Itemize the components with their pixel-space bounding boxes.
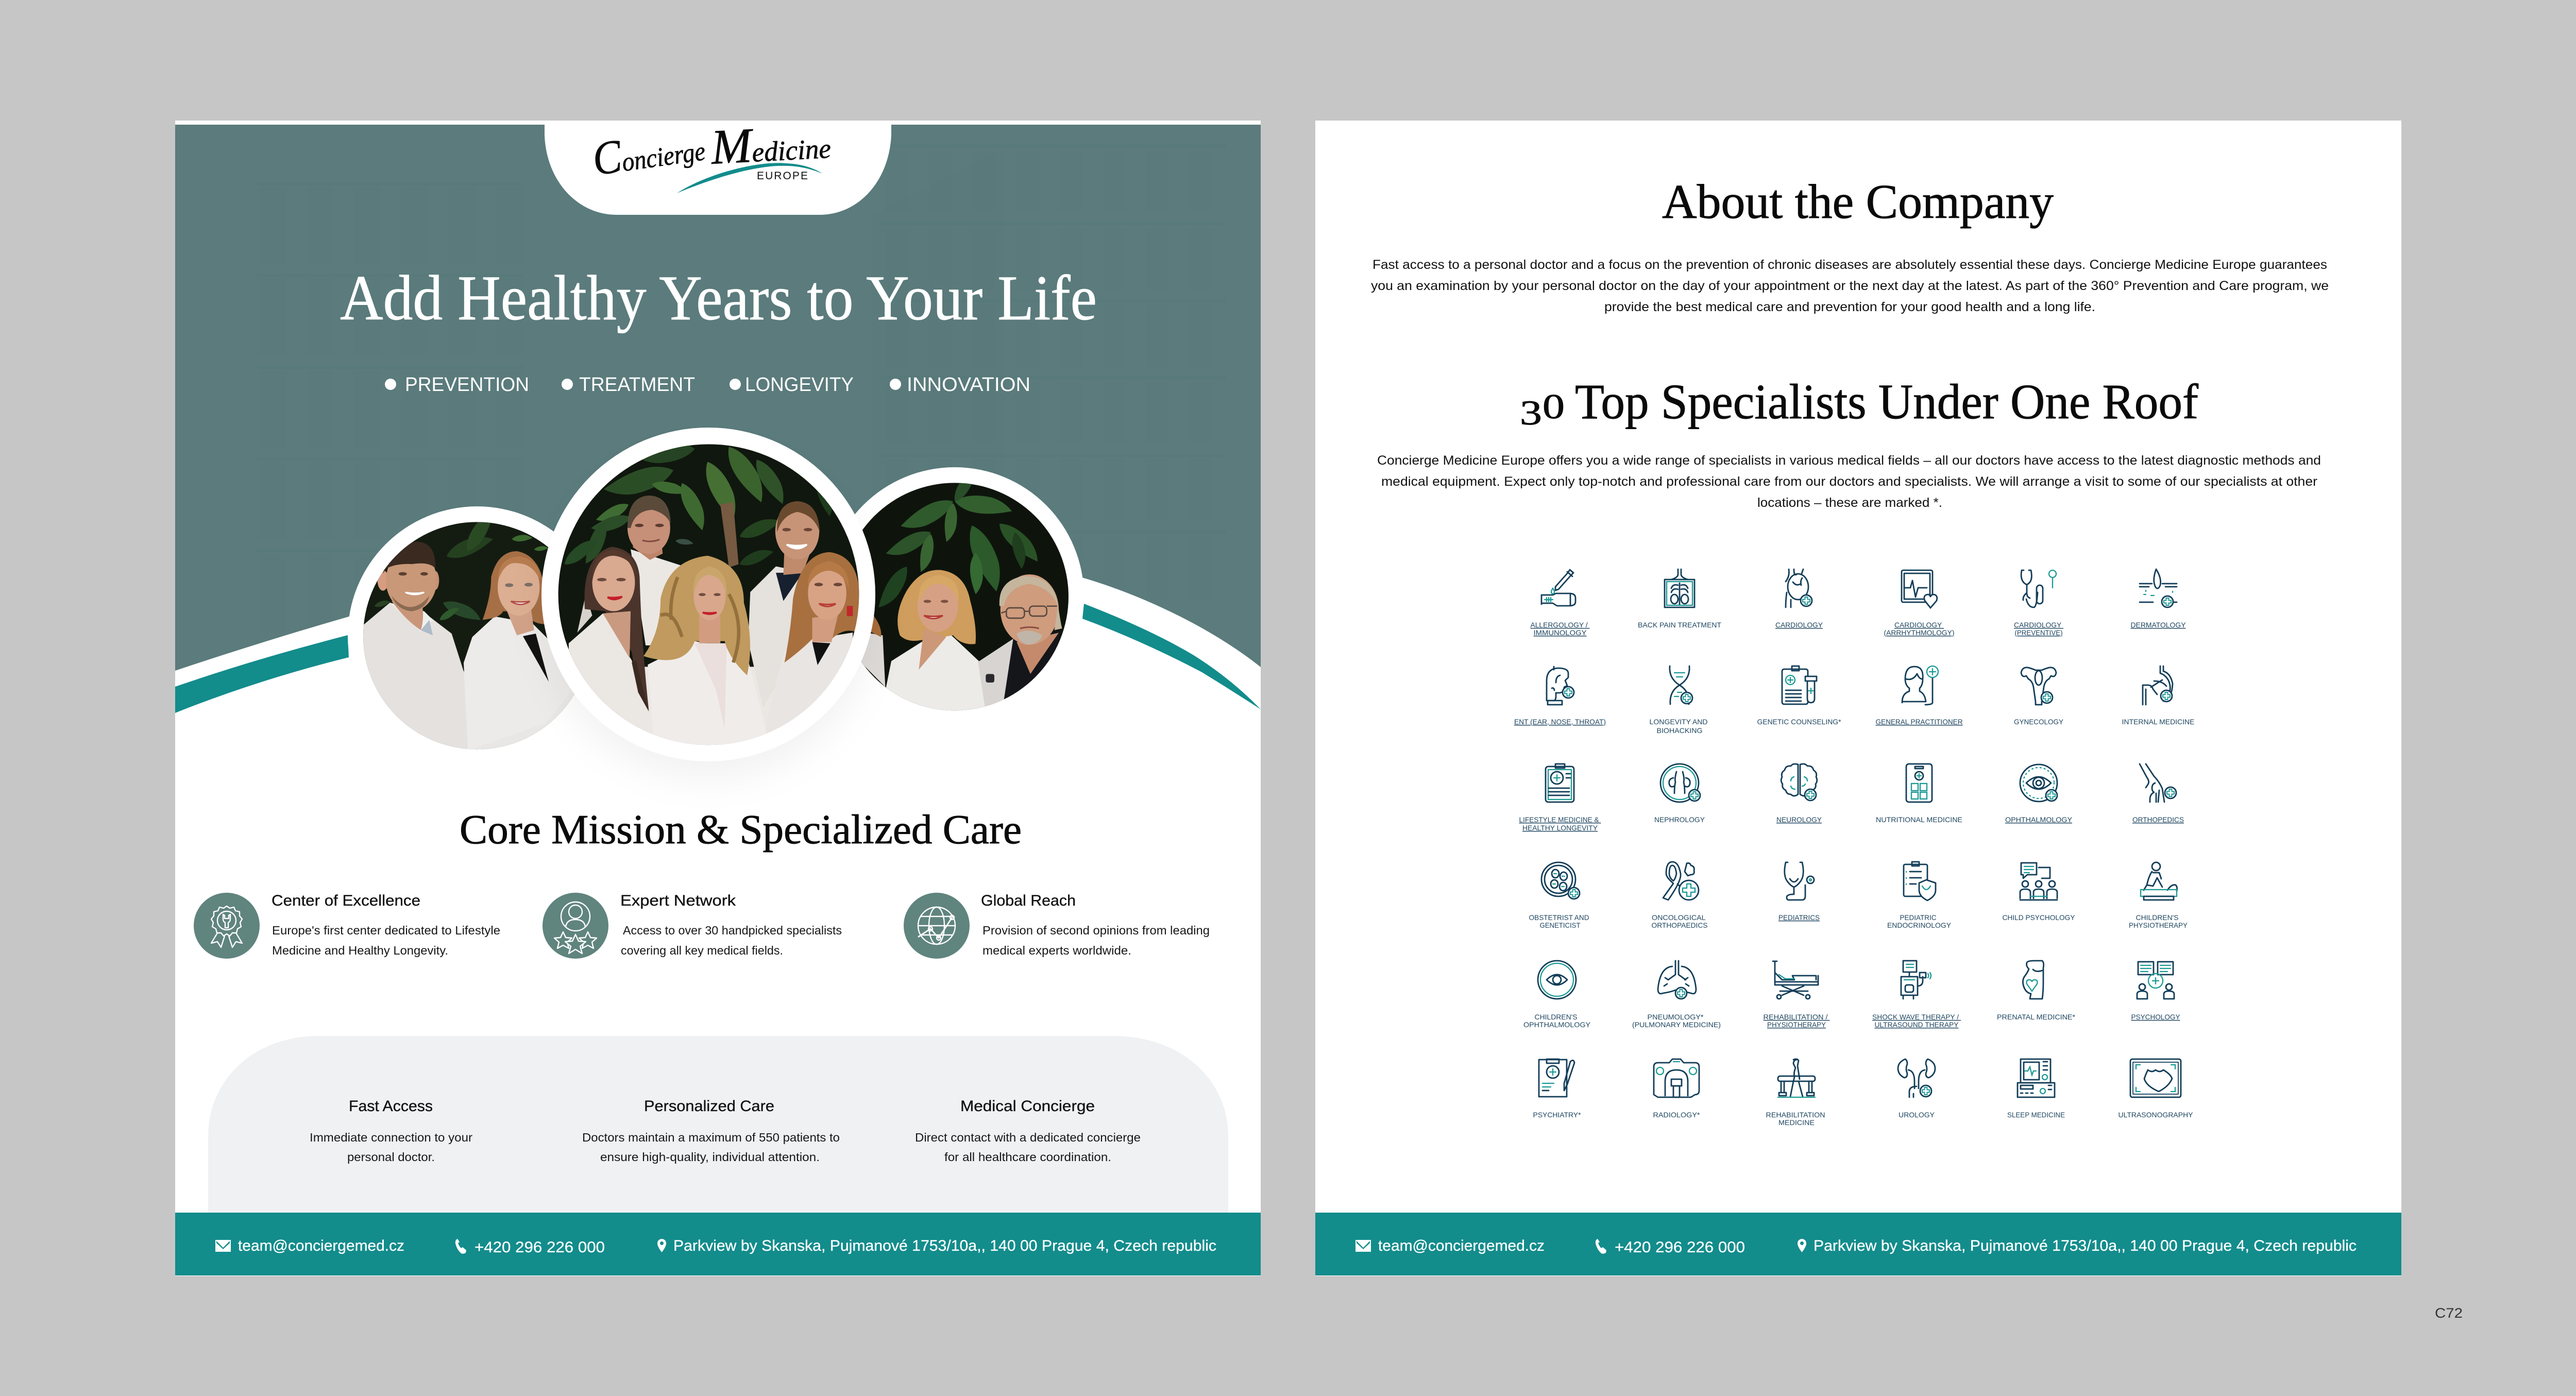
specialty: nutritional medicine bbox=[1876, 764, 1962, 824]
logo: Concierge Medicine Europe: Medicine bbox=[709, 113, 832, 175]
bullet row: INNOVATION bbox=[907, 374, 1030, 396]
specialty: shock wave therapy: ULTRASOUND THERAPY bbox=[1874, 1020, 1959, 1029]
specialty: longevity: LONGEVITY AND bbox=[1650, 718, 1708, 726]
specialty: rehabilitation medicine: REHABILITATION bbox=[1766, 1111, 1825, 1119]
specialty: children's ophthalmology bbox=[1523, 961, 1591, 1029]
back left man bbox=[631, 549, 686, 645]
heading: core mission: Core Mission & Specialized Care bbox=[460, 807, 1022, 853]
specialty: nephrology bbox=[1654, 764, 1705, 824]
icon: globe bbox=[904, 893, 970, 959]
specialty: rehabilitation physiotherapy: REHABILITATION / bbox=[1764, 1013, 1828, 1021]
text: about paragraph: Fast access to a personal doctor and a focus on the prevention of chronic diseases are absolutely essential these days. Concierge Medicine Europe guarantees bbox=[1372, 258, 2327, 272]
specialty: oncological orthopaedics: ONCOLOGICAL bbox=[1652, 913, 1706, 922]
specialty: sleep medicine: SLEEP MEDICINE bbox=[2007, 1111, 2065, 1119]
text: center of excellence bbox=[272, 892, 500, 957]
specialty: oncological orthopaedics: ORTHOPAEDICS bbox=[1652, 921, 1707, 929]
specialty: longevity bbox=[1650, 666, 1709, 735]
text: expert network bbox=[620, 892, 842, 957]
bullet row bbox=[385, 374, 1030, 396]
text: about paragraph bbox=[1371, 258, 2329, 314]
specialty: children's physiotherapy bbox=[2129, 862, 2188, 929]
specialty: pneumology: PNEUMOLOGY* bbox=[1648, 1013, 1704, 1021]
footer: right contact bar: +420 296 226 000 bbox=[1615, 1239, 1745, 1256]
photo: centre team circle bbox=[541, 428, 875, 761]
specialty: children's physiotherapy: PHYSIOTHERAPY bbox=[2129, 921, 2188, 929]
title: Add Healthy Years to Your Life bbox=[340, 263, 1097, 333]
specialty: internal medicine: INTERNAL MEDICINE bbox=[2122, 718, 2195, 726]
specialty: radiology: RADIOLOGY* bbox=[1653, 1111, 1700, 1119]
specialty: back pain treatment bbox=[1638, 569, 1721, 629]
text: expert network: Expert Network bbox=[620, 892, 736, 909]
logo: Concierge Medicine Europe bbox=[589, 113, 832, 193]
footer: left contact bar bbox=[175, 1213, 1261, 1275]
specialty: ent bbox=[1514, 667, 1606, 726]
specialty: neurology: NEUROLOGY bbox=[1776, 815, 1822, 824]
logo tab bbox=[545, 125, 891, 215]
specialty: dermatology bbox=[2131, 569, 2186, 629]
heading: about the company: About the Company bbox=[1662, 175, 2054, 229]
specialty: genetic counseling bbox=[1757, 666, 1841, 726]
service: fast access: Fast Access bbox=[349, 1098, 433, 1115]
specialty: pneumology bbox=[1632, 961, 1721, 1029]
text: center of excellence: Europe's first center dedicated to Lifestyle bbox=[272, 924, 500, 937]
footer: right contact bar: Parkview by Skanska, Pujmanové 1753/10a,, 140 00 Prague 4, Czech republic bbox=[1814, 1237, 2357, 1254]
specialties icon grid bbox=[1514, 569, 2195, 1127]
specialty: pediatric endocrinology: PEDIATRIC bbox=[1900, 913, 1937, 922]
specialty: prenatal medicine: PRENATAL MEDICINE* bbox=[1997, 1013, 2076, 1021]
specialty: child psychology: CHILD PSYCHOLOGY bbox=[2002, 913, 2075, 922]
bullet row: PREVENTION bbox=[405, 374, 529, 396]
photo: right team circle bbox=[855, 467, 1084, 711]
specialty: rehabilitation physiotherapy: PHYSIOTHERAPY bbox=[1767, 1020, 1826, 1029]
specialty: dermatology: DERMATOLOGY bbox=[2131, 621, 2186, 629]
specialty: radiology bbox=[1653, 1059, 1700, 1119]
icon: pin bbox=[657, 1239, 666, 1252]
text: center of excellence: Medicine and Healthy Longevity. bbox=[272, 944, 448, 957]
footer: left contact bar: +420 296 226 000 bbox=[474, 1239, 605, 1256]
specialty: allergology: ALLERGOLOGY / bbox=[1531, 621, 1588, 629]
footer: right contact bar: team@conciergemed.cz bbox=[1378, 1237, 1545, 1254]
bullet row: LONGEVITY bbox=[745, 374, 854, 396]
specialty: prenatal medicine bbox=[1997, 961, 2076, 1021]
white wave under the header bbox=[175, 535, 1261, 752]
specialty: child psychology bbox=[2002, 863, 2075, 922]
specialty: obstetrist bbox=[1529, 862, 1591, 929]
heading: 30 top specialists: Top Specialists Under One Roof bbox=[1575, 374, 2198, 429]
service: medical concierge: for all healthcare coordination. bbox=[944, 1150, 1111, 1164]
panel: grey services bbox=[208, 1036, 1228, 1213]
heading: 30 top specialists: 0 bbox=[1543, 387, 1565, 426]
hero: teal header with building backdrop bbox=[175, 125, 1261, 671]
feature: expert network bbox=[543, 892, 842, 959]
service: personalized care: Doctors maintain a maximum of 550 patients to bbox=[582, 1131, 840, 1144]
specialty: back pain treatment: BACK PAIN TREATMENT bbox=[1638, 621, 1721, 629]
bullet row: TREATMENT bbox=[579, 374, 695, 396]
text: expert network: Access to over 30 handpicked specialists bbox=[623, 924, 842, 937]
specialty: cardiology arrhythmology bbox=[1884, 570, 1955, 637]
text: about paragraph: you an examination by your personal doctor on the day of your appointment or the next day at the latest. As part of the 360° Prevention and Care program, we bbox=[1371, 279, 2329, 293]
specialty: general practitioner: GENERAL PRACTITIONER bbox=[1875, 718, 1963, 726]
specialty: cardiology preventive bbox=[2014, 570, 2063, 637]
specialty: ophthalmology: OPHTHALMOLOGY bbox=[2005, 815, 2073, 824]
specialty: shock wave therapy: SHOCK WAVE THERAPY / bbox=[1872, 1013, 1959, 1021]
text: global reach bbox=[981, 892, 1210, 957]
specialty: longevity: BIOHACKING bbox=[1657, 726, 1702, 735]
icon: envelope bbox=[215, 1240, 231, 1252]
service: fast access: Immediate connection to your bbox=[310, 1131, 472, 1144]
specialty: obstetrist: OBSTETRIST AND bbox=[1529, 913, 1589, 922]
specialty: shock wave therapy bbox=[1872, 961, 1961, 1029]
specialty: pneumology: (PULMONARY MEDICINE) bbox=[1632, 1020, 1721, 1029]
specialty: internal medicine bbox=[2122, 666, 2195, 726]
specialty: rehabilitation physiotherapy bbox=[1764, 961, 1829, 1029]
text: global reach: Provision of second opinions from leading bbox=[982, 924, 1210, 937]
specialty: cardiology bbox=[1775, 569, 1823, 629]
icon: person with stars bbox=[543, 893, 608, 959]
specialty: orthopedics bbox=[2132, 764, 2184, 824]
specialty: children's physiotherapy: CHILDREN'S bbox=[2136, 913, 2179, 922]
service: personalized care bbox=[582, 1098, 840, 1164]
specialty: orthopedics: ORTHOPEDICS bbox=[2132, 815, 2184, 824]
specialty: cardiology: CARDIOLOGY bbox=[1775, 621, 1823, 629]
specialty: ent: ENT (EAR, NOSE, THROAT) bbox=[1514, 718, 1606, 726]
specialty: urology bbox=[1898, 1059, 1935, 1119]
specialty: cardiology preventive: (PREVENTIVE) bbox=[2014, 628, 2063, 637]
teal swoosh left bbox=[175, 635, 349, 713]
specialty: ultrasonography: ULTRASONOGRAPHY bbox=[2119, 1111, 2193, 1119]
specialty: psychology: PSYCHOLOGY bbox=[2131, 1013, 2180, 1021]
specialty: lifestyle medicine: HEALTHY LONGEVITY bbox=[1522, 824, 1598, 832]
specialty: ultrasonography bbox=[2119, 1059, 2193, 1119]
teal swoosh right bbox=[1082, 604, 1261, 709]
icon: phone bbox=[1596, 1239, 1606, 1254]
specialty: oncological orthopaedics bbox=[1652, 862, 1707, 929]
footer: left contact bar: Parkview by Skanska, Pujmanové 1753/10a,, 140 00 Prague 4, Czech republic bbox=[673, 1237, 1216, 1254]
feature: global reach bbox=[904, 892, 1210, 959]
text: global reach: Global Reach bbox=[981, 892, 1076, 909]
service: fast access bbox=[310, 1098, 472, 1164]
specialty: allergology bbox=[1531, 570, 1589, 637]
specialty: general practitioner bbox=[1875, 666, 1963, 726]
specialty: psychiatry bbox=[1533, 1059, 1581, 1119]
logo: Concierge Medicine Europe: Concierge bbox=[589, 117, 708, 185]
service: medical concierge: Medical Concierge bbox=[960, 1098, 1095, 1115]
page code: C72 bbox=[2435, 1305, 2463, 1321]
logo: Concierge Medicine Europe: EUROPE bbox=[757, 170, 808, 182]
specialty: gynecology: GYNECOLOGY bbox=[2014, 718, 2064, 726]
right woman bbox=[763, 633, 853, 735]
specialty: cardiology arrhythmology: CARDIOLOGY bbox=[1894, 621, 1942, 629]
icon: phone bbox=[455, 1239, 466, 1254]
specialty: children's ophthalmology: OPHTHALMOLOGY bbox=[1523, 1020, 1591, 1029]
specialty: pediatrics bbox=[1778, 862, 1820, 922]
specialty: genetic counseling: GENETIC COUNSELING* bbox=[1757, 718, 1841, 726]
text: specialists paragraph: locations – these are marked *. bbox=[1757, 496, 1942, 510]
text: specialists paragraph bbox=[1377, 453, 2321, 510]
specialty: psychiatry: PSYCHIATRY* bbox=[1533, 1111, 1581, 1119]
text: center of excellence: Center of Excellence bbox=[272, 892, 420, 909]
specialty: gynecology bbox=[2014, 668, 2064, 726]
text: specialists paragraph: Concierge Medicine Europe offers you a wide range of specialists in various medical fields – all our doctors have access to the latest diagnostic methods and bbox=[1377, 453, 2321, 468]
specialty: ophthalmology bbox=[2005, 764, 2073, 824]
icon: pin bbox=[1798, 1239, 1806, 1252]
specialty: lifestyle medicine bbox=[1519, 764, 1601, 832]
feature: center of excellence bbox=[194, 892, 500, 959]
footer: left contact bar: team@conciergemed.cz bbox=[238, 1237, 404, 1254]
specialty: cardiology arrhythmology: (ARRHYTHMOLOGY) bbox=[1884, 628, 1955, 637]
specialty: sleep medicine bbox=[2007, 1059, 2065, 1119]
specialty: rehabilitation medicine: MEDICINE bbox=[1778, 1118, 1815, 1127]
icon: envelope bbox=[1355, 1240, 1371, 1252]
text: about paragraph: provide the best medical care and prevention for your good health and a long life. bbox=[1604, 300, 2095, 314]
back right man bbox=[749, 567, 799, 667]
specialty: cardiology preventive: CARDIOLOGY bbox=[2014, 621, 2062, 629]
heading: 30 top specialists: 3 bbox=[1520, 393, 1542, 432]
text: specialists paragraph: medical equipment. Expect only top-notch and professional care from our doctors and specialists. We will arrange a visit to some of our specialists at other bbox=[1381, 474, 2317, 489]
panel: left flyer page bbox=[175, 113, 1261, 1276]
specialty: lifestyle medicine: LIFESTYLE MEDICINE & bbox=[1519, 815, 1599, 824]
left woman bbox=[584, 547, 649, 710]
specialty: pediatrics: PEDIATRICS bbox=[1778, 913, 1820, 922]
panel: right flyer page bbox=[1315, 121, 2401, 1276]
service: fast access: personal doctor. bbox=[347, 1150, 435, 1164]
specialty: urology: UROLOGY bbox=[1899, 1111, 1935, 1119]
specialty: rehabilitation medicine bbox=[1766, 1059, 1827, 1127]
footer: right contact bar bbox=[1315, 1213, 2401, 1275]
specialty: psychology bbox=[2131, 962, 2180, 1021]
specialty: allergology: IMMUNOLOGY bbox=[1533, 628, 1587, 637]
specialty: pediatric endocrinology: ENDOCRINOLOGY bbox=[1887, 921, 1952, 929]
specialty: nephrology: NEPHROLOGY bbox=[1654, 815, 1705, 824]
text: global reach: medical experts worldwide. bbox=[982, 944, 1131, 957]
specialty: nutritional medicine: NUTRITIONAL MEDICINE bbox=[1876, 815, 1962, 824]
service: personalized care: ensure high-quality, individual attention. bbox=[600, 1150, 820, 1164]
service: personalized care: Personalized Care bbox=[644, 1098, 774, 1115]
specialty: children's ophthalmology: CHILDREN'S bbox=[1535, 1013, 1578, 1021]
specialty: pediatric endocrinology bbox=[1887, 862, 1952, 929]
service: medical concierge bbox=[915, 1098, 1141, 1164]
icon: award bbox=[194, 893, 260, 959]
specialty: obstetrist: GENETICIST bbox=[1539, 921, 1581, 929]
centre woman bbox=[648, 641, 767, 748]
specialty: neurology bbox=[1776, 764, 1822, 824]
service: medical concierge: Direct contact with a dedicated concierge bbox=[915, 1131, 1141, 1144]
photo: left team circle bbox=[348, 506, 574, 750]
text: expert network: covering all key medical fields. bbox=[621, 944, 783, 957]
